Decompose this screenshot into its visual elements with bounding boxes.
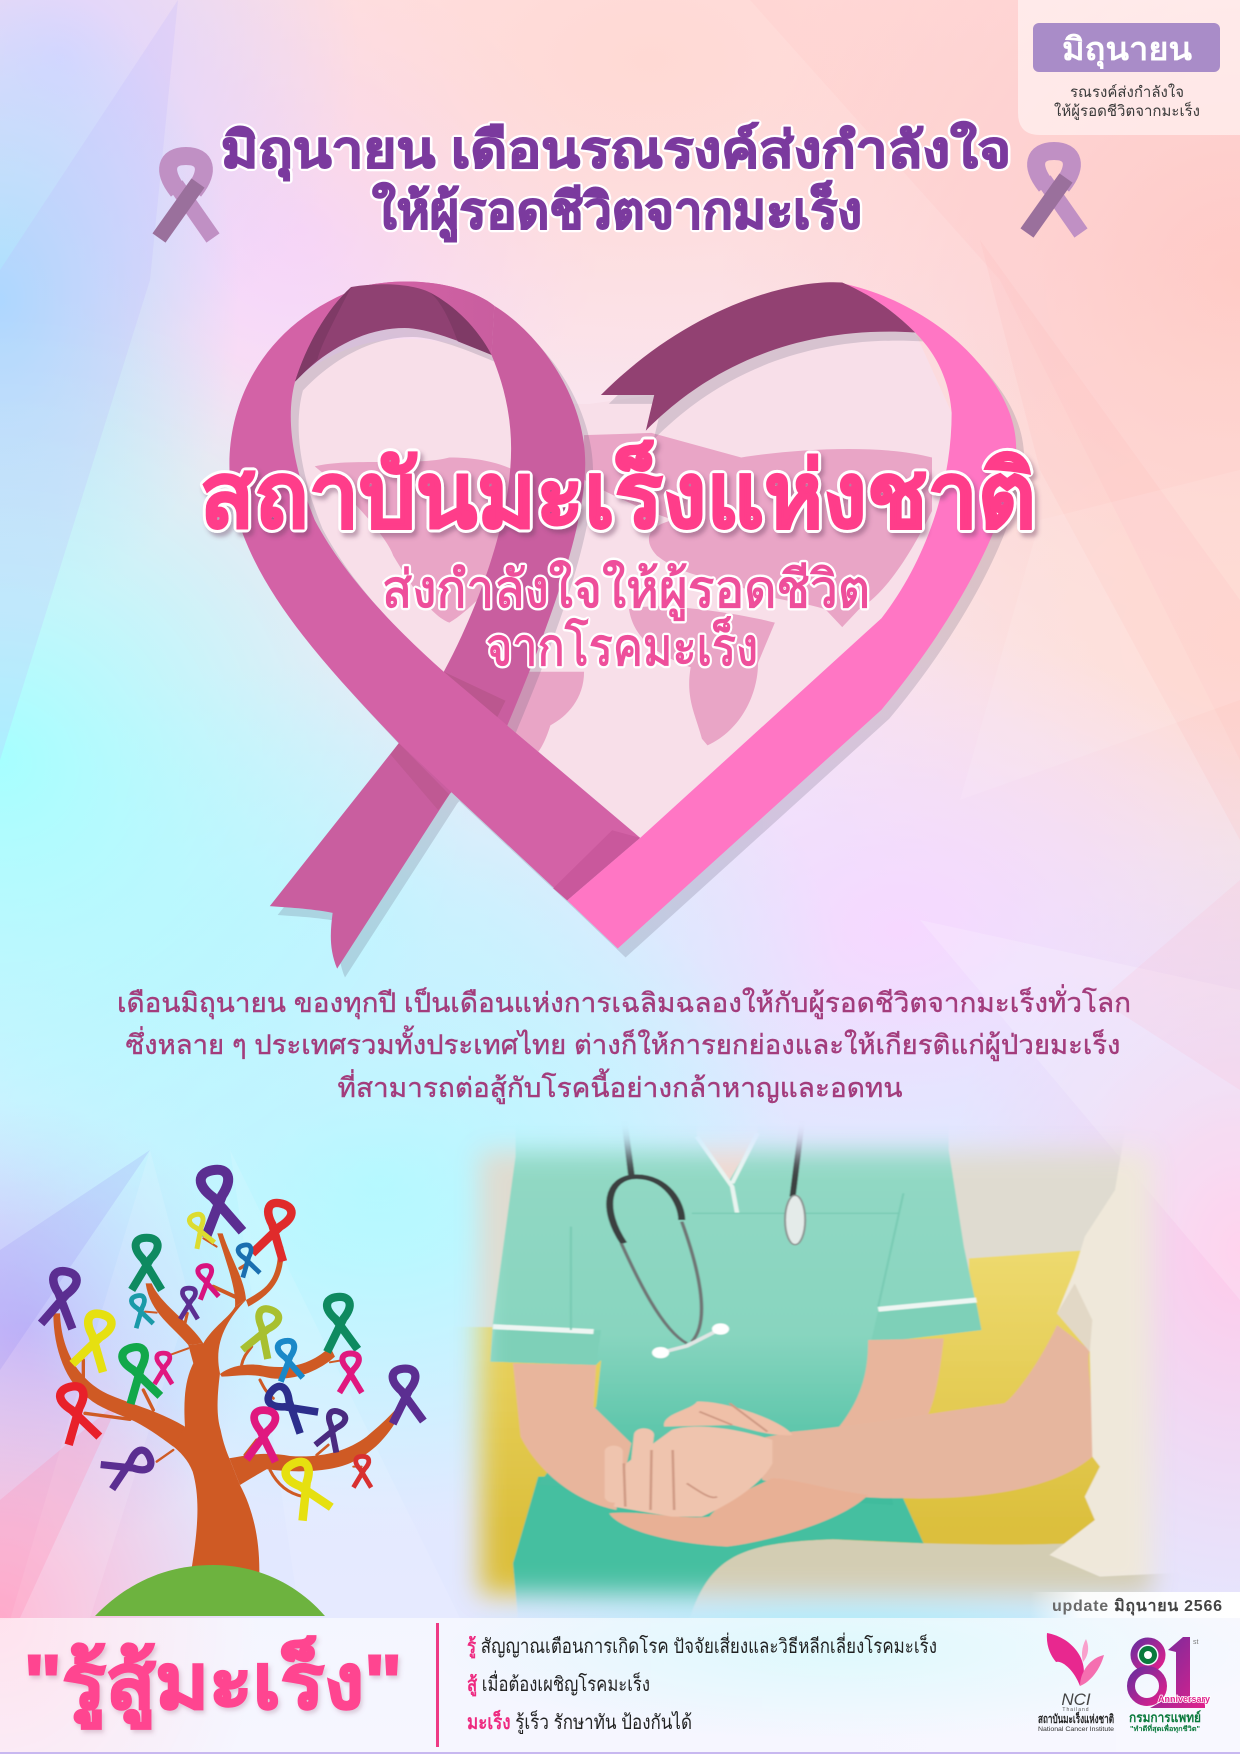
ribbon right loop side and tail [270, 306, 585, 969]
title: ให้ผู้รอดชีวิตจากมะเร็ง [372, 180, 862, 242]
institute headline: สถาบันมะเร็งแห่งชาติ [200, 440, 1036, 547]
month campaign caption: ให้ผู้รอดชีวิตจากมะเร็ง [1054, 101, 1200, 120]
tree of ribbons illustration [41, 1167, 423, 1616]
logo: Department of Medical Services 81st anniversary: กรมการแพทย์ [1129, 1710, 1201, 1725]
intro paragraph: ที่สามารถต่อสู้กับโรคนี้อย่างกล้าหาญและอดทน [338, 1068, 902, 1104]
update strip [1030, 1592, 1240, 1618]
logo: Department of Medical Services 81st anniversary: st [1193, 1639, 1198, 1646]
patient leg [693, 1538, 1170, 1612]
intro paragraph: ซึ่งหลาย ๆ ประเทศรวมทั้งประเทศไทย ต่างก็ให้การยกย่องและให้เกียรติแก่ผู้ป่วยมะเร็ง [126, 1025, 1120, 1061]
nurse trousers [512, 1476, 924, 1614]
heart interior [291, 330, 952, 838]
institute sub-headline: ส่งกำลังใจให้ผู้รอดชีวิต [382, 560, 870, 621]
cuffs [493, 1300, 976, 1332]
photo: nurse holding patient's hands [459, 1131, 1167, 1615]
update date: update มิถุนายน 2566 [1052, 1597, 1222, 1616]
heart ribbon illustration [200, 282, 1036, 978]
title: มิถุนายน เดือนรณรงค์ส่งกำลังใจ [221, 121, 1011, 181]
title: มิถุนายน เดือนรณรงค์ส่งกำลังใจ [221, 121, 1011, 181]
institute headline: สถาบันมะเร็งแห่งชาติ [200, 440, 1036, 547]
patient arm [752, 1325, 1093, 1498]
icon: left lavender ribbon [159, 156, 213, 238]
nurse lower hand [609, 1478, 868, 1547]
patient fingers [604, 1428, 656, 1502]
logo: National Cancer Institute: National Cancer Institute [1038, 1726, 1114, 1733]
nurse arms [513, 1363, 631, 1510]
nurse upper hand [664, 1402, 793, 1435]
patient hand [614, 1427, 772, 1517]
coloured ribbons [41, 1167, 423, 1521]
right ribbon strand [567, 283, 1016, 949]
campaign slogan: "รู้สู้มะเร็ง" [24, 1636, 402, 1729]
logo: Department of Medical Services 81st anniversary [1129, 1637, 1210, 1733]
logo: National Cancer Institute [1038, 1633, 1114, 1733]
month campaign caption: รณรงค์ส่งกำลังใจ [1070, 83, 1184, 101]
intro paragraph: เดือนมิถุนายน ของทุกปี เป็นเดือนแห่งการเฉลิมฉลองให้กับผู้รอดชีวิตจากมะเร็งทั่วโลก [117, 984, 1131, 1020]
slogan explanation [467, 1632, 937, 1735]
slogan explanation: สู้ เมื่อต้องเผชิญโรคมะเร็ง [467, 1670, 650, 1698]
hill [95, 1565, 325, 1616]
logo: National Cancer Institute: สถาบันมะเร็งแห่งชาติ [1038, 1711, 1114, 1726]
ribbon shadows [237, 290, 1024, 978]
slogan explanation: มะเร็ง รู้เร็ว รักษาทัน ป้องกันได้ [467, 1709, 692, 1735]
institute sub-headline: จากโรคมะเร็ง [486, 617, 758, 677]
patient blouse [1050, 1152, 1172, 1577]
institute sub-headline [382, 560, 870, 677]
title [221, 121, 1011, 242]
institute sub-headline: ส่งกำลังใจให้ผู้รอดชีวิต [382, 560, 870, 621]
icon: right lavender ribbon [1027, 151, 1081, 233]
intro paragraph [117, 984, 1131, 1104]
tree trunk and branches [53, 1233, 402, 1575]
logo: National Cancer Institute: NCI [1061, 1690, 1091, 1709]
logo: Department of Medical Services 81st anniversary: "ทำดีที่สุดเพื่อทุกชีวิต" [1130, 1723, 1200, 1733]
world map [315, 433, 932, 757]
left ribbon strand [229, 282, 640, 900]
right dark inner band [601, 282, 915, 431]
logo: National Cancer Institute: Thailand [1062, 1707, 1090, 1713]
nurse scrub top [490, 1136, 976, 1478]
stethoscope [605, 1132, 803, 1353]
neck [699, 1135, 752, 1180]
slogan explanation: รู้ สัญญาณเตือนการเกิดโรค ปัจจัยเสี่ยงและวิธีหลีกเลี่ยงโรคมะเร็ง [467, 1632, 937, 1660]
month pill label: มิถุนายน [1062, 31, 1192, 70]
left loop dark inner band [295, 284, 491, 382]
logo: Department of Medical Services 81st anniversary: Anniversary [1158, 1694, 1210, 1704]
bottom band [0, 1618, 1240, 1754]
institute sub-headline: จากโรคมะเร็ง [486, 617, 758, 677]
title: ให้ผู้รอดชีวิตจากมะเร็ง [372, 180, 862, 242]
month pill [1033, 23, 1220, 72]
month tab [1018, 0, 1240, 135]
